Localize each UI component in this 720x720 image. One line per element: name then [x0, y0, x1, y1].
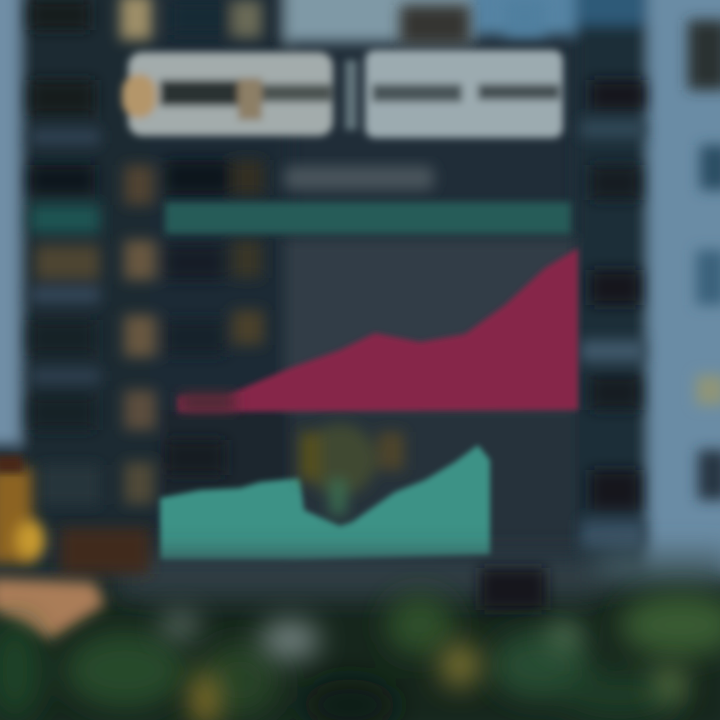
- chart: red area: [178, 248, 578, 412]
- banner: blurred title text: [122, 50, 563, 138]
- orange structure bottom left: [0, 456, 150, 640]
- street level: [0, 552, 720, 720]
- foliage: [0, 593, 720, 720]
- chart: teal area: [160, 445, 490, 560]
- dark van: [480, 568, 546, 610]
- chart: tree silhouette in front of chart: [300, 424, 404, 515]
- window rows: [30, 0, 645, 550]
- subtitle: blurred text: [284, 166, 434, 190]
- right tower windows: [688, 20, 720, 500]
- teal header bar: [165, 202, 571, 234]
- foliage highlights: [160, 613, 686, 720]
